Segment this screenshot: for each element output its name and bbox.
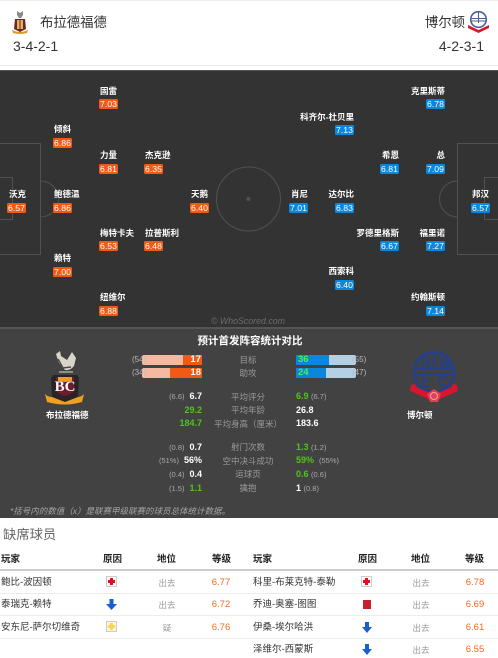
player: 科齐尔-杜贝里: [300, 112, 354, 135]
player: 纽维尔: [99, 292, 126, 316]
player: 梅特卡夫: 6.53: [100, 241, 117, 251]
player: 天鹅: 天鹅: [191, 189, 208, 199]
table header: 地位: [411, 554, 430, 565]
player: 西索科: [328, 266, 354, 290]
row: 科里-布莱克特-泰勒: [249, 573, 498, 593]
heading: missing players: 缺席球员: [3, 527, 56, 542]
player: 希恩: [380, 150, 399, 174]
player: 希恩: 6.81: [381, 164, 398, 174]
goals bar: home: 17: [190, 354, 201, 365]
row: dribbles home: (0.4) 0.4: [169, 469, 202, 479]
player: 倾斜: 6.86: [54, 138, 71, 148]
assists bar: away: 24: [298, 367, 309, 378]
player: 梅特卡夫: [99, 228, 134, 251]
row: 乔迪-奥塞-图图: 6.69: [466, 599, 484, 610]
row: age home: 29.2: [184, 405, 202, 415]
player: 沃克: 沃克: [9, 189, 26, 199]
table header: [0, 552, 498, 571]
row: dribbles away: 0.6 (0.6): [296, 469, 326, 479]
row: height home: 184.7: [179, 418, 202, 428]
player: 邦汉: [471, 189, 490, 213]
panel: lineup stats comparison: [0, 329, 498, 518]
icon: Bradford crest large: BC: [55, 379, 75, 395]
row: 泰瑞克-赖特: 6.72: [212, 599, 230, 610]
table header: 原因: [358, 554, 377, 565]
row: 鲍比-波因顿: 出去: [158, 578, 176, 588]
player: 倾斜: [53, 124, 72, 148]
icon: Bolton crest small: [468, 10, 489, 33]
table header: 等级: [212, 554, 231, 565]
assists bar: home: (34): [132, 368, 146, 377]
icon: injury: [361, 576, 372, 587]
label: goals: 目标: [239, 355, 256, 365]
player: 达尔比: [328, 189, 354, 213]
player: 固雷: 固雷: [100, 86, 117, 96]
table header: 地位: [157, 554, 176, 565]
player: 罗德里格斯: [356, 228, 399, 251]
player: 约翰斯顿: 7.14: [427, 306, 444, 316]
row: shots away: 1.3 (1.2): [296, 442, 326, 452]
assists bar: away: (47): [352, 368, 366, 377]
player: 肖尼: [289, 189, 308, 213]
player: 杰克逊: 6.35: [145, 164, 162, 174]
footnote: *括号内的数值（x）是联赛甲级联赛的球员总体统计数据。: [10, 506, 230, 516]
icon: Bradford crest large: [45, 351, 84, 404]
player: 克里斯蒂: 6.78: [427, 99, 444, 109]
row: 伊桑-埃尔哈洪: 伊桑-埃尔哈洪: [253, 622, 313, 633]
player: 总: [426, 150, 445, 174]
assists bar: home: [132, 367, 202, 378]
player: 倾斜: 倾斜: [54, 124, 71, 134]
away formation: 4-2-3-1: [439, 38, 484, 54]
assists bar: away: [296, 367, 366, 378]
table header: 玩家: [253, 554, 272, 565]
player: 肖尼: 7.01: [290, 203, 307, 213]
row: rating home: (6.6) 6.7: [169, 391, 202, 401]
row: 鲍比-波因顿: 鲍比-波因顿: [1, 577, 52, 588]
player: 固雷: 7.03: [100, 99, 117, 109]
home formation: 3-4-2-1: [13, 38, 58, 54]
player: 纽维尔: 纽维尔: [100, 292, 126, 302]
row: 安东尼-萨尔切维奇: [0, 618, 249, 638]
player: 克里斯蒂: [411, 86, 445, 109]
table header: 原因: [103, 554, 122, 565]
label: assists: 助攻: [239, 368, 256, 378]
player: 力量: 6.81: [100, 164, 117, 174]
home team name: 布拉德福德: [40, 15, 107, 30]
row: 鲍比-波因顿: [0, 573, 249, 593]
player: 鲍德温: 6.86: [54, 203, 71, 213]
goals bar: away: 36: [298, 354, 309, 365]
icon: Bradford crest small: [12, 11, 28, 34]
player: 力量: [99, 150, 118, 174]
player: 克里斯蒂: 克里斯蒂: [411, 86, 445, 96]
away crest name: 博尔顿: [407, 410, 433, 420]
row: dribbles label: 运球页: [235, 469, 261, 479]
player: 杰克逊: 杰克逊: [145, 150, 171, 160]
icon: down arrow: [362, 622, 372, 633]
row: 泽维尔-西蒙斯: [249, 640, 498, 658]
stats title: 预计首发阵容统计对比: [198, 335, 302, 347]
player: 福里诺: 福里诺: [419, 228, 445, 238]
panel: pitch: [0, 70, 498, 329]
row: 泰瑞克-赖特: [0, 595, 249, 615]
player: 杰克逊: [144, 150, 171, 174]
player: 科齐尔-杜贝里: 科齐尔-杜贝里: [300, 112, 354, 122]
player: 科齐尔-杜贝里: 7.13: [336, 125, 353, 135]
row: shots home: (0.8) 0.7: [169, 442, 202, 452]
player: 罗德里格斯: 罗德里格斯: [356, 228, 399, 238]
player: 总: 总: [436, 150, 445, 160]
goals bar: home: (54): [132, 355, 146, 364]
icon: doubtful: [106, 621, 117, 632]
player: 鲍德温: [53, 189, 80, 213]
row: 鲍比-波因顿: 6.77: [212, 577, 230, 588]
row: rating label: 平均评分: [231, 392, 265, 402]
player: 纽维尔: 6.88: [100, 306, 117, 316]
player: 达尔比: 6.83: [336, 203, 353, 213]
player: 天鹅: [190, 189, 209, 213]
player: 邦汉: 6.57: [472, 203, 489, 213]
row: 泽维尔-西蒙斯: 出去: [412, 645, 430, 655]
table header: 玩家: [1, 554, 20, 565]
player: 约翰斯顿: [411, 292, 445, 316]
player: 赖特: [53, 253, 72, 277]
row: age away: 26.8: [296, 405, 314, 415]
row: aerial away: 59% (55%): [296, 455, 339, 465]
row: 安东尼-萨尔切维奇: 安东尼-萨尔切维奇: [1, 622, 80, 633]
icon: injury: [106, 576, 117, 587]
player: 西索科: 6.40: [336, 280, 353, 290]
player: 福里诺: 7.27: [427, 241, 444, 251]
player: 沃克: 6.57: [8, 203, 25, 213]
row: 泰瑞克-赖特: 出去: [158, 600, 176, 610]
row: 乔迪-奥塞-图图: 乔迪-奥塞-图图: [253, 599, 316, 610]
goals bar: away: (55): [352, 355, 366, 364]
row: 乔迪-奥塞-图图: [249, 595, 498, 615]
row: 伊桑-埃尔哈洪: 6.61: [466, 622, 484, 633]
row: height label: 平均身高（厘米）: [214, 419, 282, 429]
player: 梅特卡夫: 梅特卡夫: [100, 228, 134, 238]
player: 约翰斯顿: 约翰斯顿: [411, 292, 445, 302]
player: 赖特: 赖特: [54, 253, 71, 263]
row: tackles away: 1 (0.8): [296, 483, 319, 493]
row: 泽维尔-西蒙斯: 6.55: [466, 644, 484, 655]
row: tackles home: (1.5) 1.1: [169, 483, 202, 493]
row: aerial home: (51%) 56%: [159, 455, 202, 465]
row: age label: 平均年龄: [231, 405, 265, 415]
pitch markings: [0, 143, 498, 255]
player: 罗德里格斯: 6.67: [381, 241, 398, 251]
home crest name: 布拉德福德: [46, 410, 89, 420]
player: 鲍德温: 鲍德温: [54, 189, 80, 199]
player: 西索科: 西索科: [328, 266, 354, 276]
goals bar: away: [296, 354, 366, 365]
row: aerial label: 空中决斗成功: [222, 456, 274, 466]
row: tackles label: 擒抱: [239, 483, 256, 493]
row: rating away: 6.9 (6.7): [296, 391, 326, 401]
row: 安东尼-萨尔切维奇: 疑: [163, 623, 171, 633]
icon: red card: [363, 600, 371, 609]
row: 科里-布莱克特-泰勒: 出去: [412, 578, 430, 588]
table header: 等级: [465, 554, 484, 565]
player: 总: 7.09: [427, 164, 444, 174]
icon: Bolton crest large: [409, 350, 459, 406]
player: 达尔比: 达尔比: [328, 189, 354, 199]
row: shots label: 射门次数: [231, 442, 265, 452]
row: 泰瑞克-赖特: 泰瑞克-赖特: [1, 599, 52, 610]
header: [0, 0, 498, 66]
player: 天鹅: 6.40: [191, 203, 208, 213]
icon: down arrow: [106, 599, 117, 610]
icon: down arrow: [362, 644, 372, 655]
player: 沃克: [7, 189, 26, 213]
assists bar: home: 18: [190, 367, 201, 378]
player: 拉普斯利: 6.48: [145, 241, 162, 251]
player: 福里诺: [419, 228, 445, 251]
goals bar: home: [132, 354, 202, 365]
row: 乔迪-奥塞-图图: 出去: [412, 600, 430, 610]
player: 希恩: 希恩: [382, 150, 399, 160]
watermark: © WhoScored.com: [211, 316, 285, 326]
away team name: 博尔顿: [425, 15, 465, 30]
row: 科里-布莱克特-泰勒: 科里-布莱克特-泰勒: [253, 577, 335, 588]
player: 肖尼: 肖尼: [291, 189, 308, 199]
player: 邦汉: 邦汉: [472, 189, 489, 199]
row: 泽维尔-西蒙斯: 泽维尔-西蒙斯: [253, 644, 313, 655]
player: 拉普斯利: [144, 228, 179, 251]
row: height away: 183.6: [296, 418, 319, 428]
row: 安东尼-萨尔切维奇: 6.76: [212, 622, 230, 633]
row: 伊桑-埃尔哈洪: [249, 618, 498, 638]
player: 力量: 力量: [100, 150, 117, 160]
player: 赖特: 7.00: [54, 267, 71, 277]
player: 拉普斯利: 拉普斯利: [145, 228, 179, 238]
player: 固雷: [99, 86, 118, 109]
row: 伊桑-埃尔哈洪: 出去: [412, 623, 430, 633]
row: 科里-布莱克特-泰勒: 6.78: [466, 577, 484, 588]
